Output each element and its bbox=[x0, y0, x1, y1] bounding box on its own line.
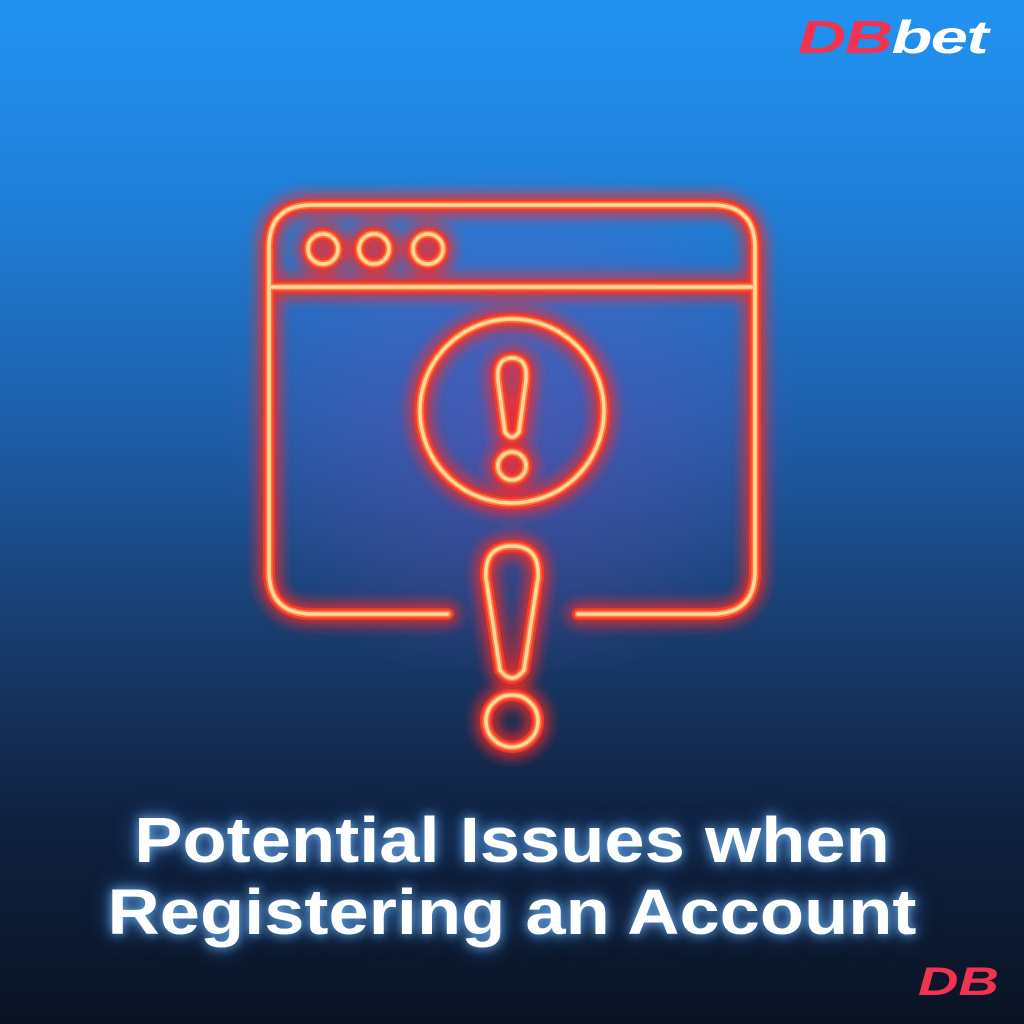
background glow bbox=[230, 170, 794, 670]
title bbox=[96, 804, 926, 960]
title: Potential Issues when bbox=[134, 804, 890, 876]
logo: DBbet: DBbet bbox=[798, 11, 987, 63]
logo: DB small: DB bbox=[918, 960, 999, 1004]
title: Registering an Account bbox=[107, 876, 917, 948]
